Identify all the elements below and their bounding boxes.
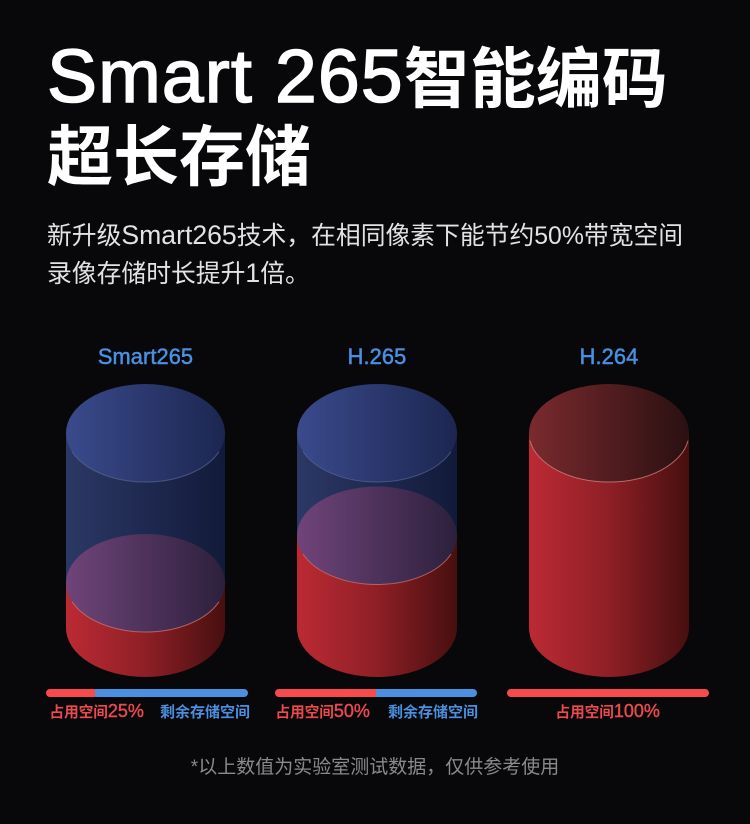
- label: used 25%: 占用空间25%: [50, 701, 144, 721]
- usage bar: H.264: [507, 688, 709, 696]
- label: remaining, H.265: 剩余存储空间: [388, 704, 478, 721]
- usage bar: H.265: [275, 689, 477, 697]
- label: remaining, Smart265: 剩余存储空间: [160, 704, 250, 721]
- description text: [47, 220, 683, 288]
- cylinder: H.264: [529, 384, 689, 677]
- heading: H.264: H.264: [580, 344, 638, 369]
- footnote: *以上数值为实验室测试数据，仅供参考使用: [191, 757, 559, 778]
- label: used 50%: 占用空间50%: [276, 701, 370, 721]
- cylinder: Smart265: [66, 384, 225, 677]
- description text: 录像存储时长提升1倍。: [47, 258, 310, 288]
- heading: H.265: H.265: [348, 344, 406, 369]
- label: used 100%: 占用空间100%: [556, 701, 660, 721]
- title: 超长存储: [47, 120, 311, 194]
- cylinder: H.265: [297, 384, 457, 677]
- heading: Smart265: Smart265: [98, 344, 193, 369]
- usage bar: Smart265: [46, 689, 248, 697]
- description text: 新升级Smart265技术，在相同像素下能节约50%带宽空间: [47, 220, 683, 250]
- title: Smart 265智能编码: [47, 34, 668, 118]
- title: [47, 34, 668, 194]
